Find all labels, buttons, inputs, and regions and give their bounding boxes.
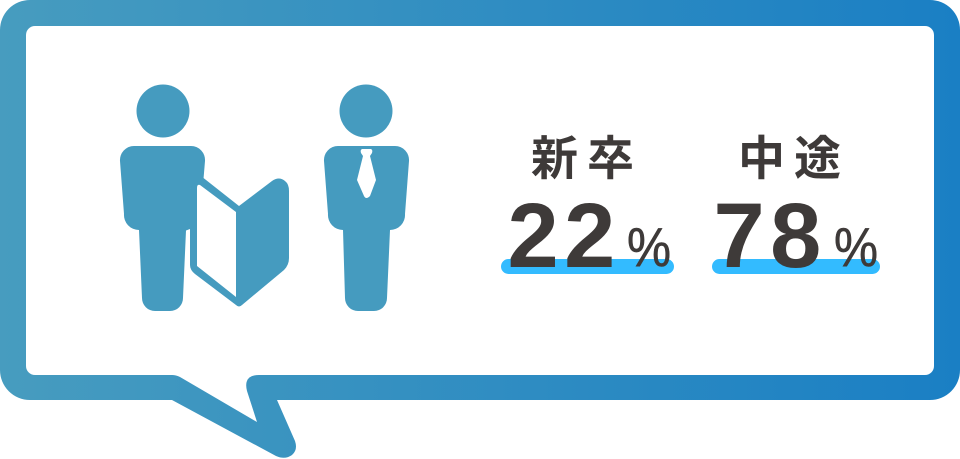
highlight bar: [501, 259, 674, 274]
percent sign: %: [627, 216, 671, 278]
head: [136, 84, 190, 138]
highlight bar: [712, 259, 880, 274]
stat: mid-career hires: [712, 132, 880, 287]
value: 78: [714, 185, 827, 287]
icon: businessperson with tie: [324, 84, 409, 311]
label: 中途: [738, 132, 850, 185]
body: [120, 146, 205, 311]
label: 新卒: [531, 132, 643, 185]
value: 22: [508, 185, 621, 287]
body: [324, 146, 409, 311]
beginner mark book: [190, 178, 289, 306]
icon: new graduate person with beginner mark: [120, 84, 289, 311]
head: [340, 84, 392, 138]
percent sign: %: [834, 216, 878, 278]
stat: new graduates: [501, 132, 674, 287]
necktie: [357, 149, 376, 198]
